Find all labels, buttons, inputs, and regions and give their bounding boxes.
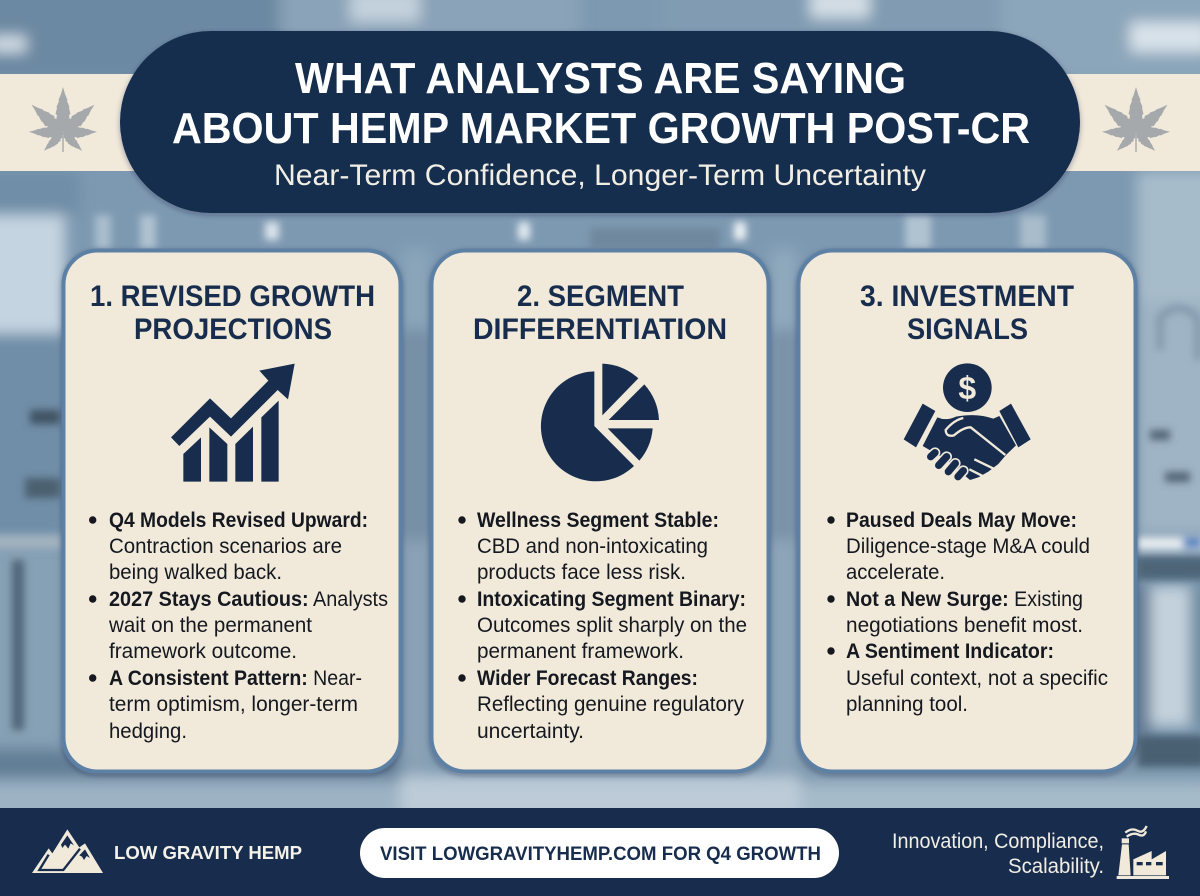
bullet list: investment signals: Useful context, not a specific (846, 667, 1108, 690)
call to action button (360, 828, 839, 878)
bullet list: segment differentiation: Outcomes split sharply on the (477, 614, 747, 637)
bullet list: segment differentiation: Wider Forecast Ranges: (477, 667, 698, 690)
bullet list: revised growth projections: term optimism, longer-term (109, 693, 358, 716)
bullet list: revised growth projections: framework outcome. (109, 640, 297, 663)
heading: revised growth projections: 1. REVISED GROWTH (90, 280, 375, 313)
bullet list: investment signals: Diligence-stage M&A could (846, 535, 1090, 558)
bullet list: revised growth projections: wait on the permanent (108, 614, 312, 637)
heading: investment signals (860, 280, 1074, 346)
bullet list: revised growth projections: 2027 Stays Cautious: Analysts (109, 588, 388, 611)
heading: revised growth projections (90, 280, 375, 346)
tagline (892, 830, 1104, 878)
tagline: Scalability. (1008, 855, 1104, 878)
title: WHAT ANALYSTS ARE SAYING (295, 54, 906, 103)
bullet list: investment signals (827, 509, 1108, 716)
bullet list: revised growth projections: Contraction scenarios are (109, 535, 342, 558)
cream banner strip (0, 74, 1200, 171)
bullet list: revised growth projections: hedging. (109, 720, 187, 743)
bullet list: revised growth projections: Q4 Models Revised Upward: (109, 509, 368, 532)
bullet list: segment differentiation (458, 509, 747, 743)
heading: revised growth projections: PROJECTIONS (134, 313, 332, 346)
bullet list: segment differentiation: Wellness Segment Stable: (477, 509, 719, 532)
icon: mountain logo (32, 829, 103, 873)
heading: segment differentiation: DIFFERENTIATION (473, 313, 727, 346)
icon: hemp leaf right (1100, 87, 1172, 154)
icon: factory (1117, 826, 1169, 879)
bullet list: revised growth projections: A Consistent Pattern: Near- (109, 667, 362, 690)
bullet list: investment signals: A Sentiment Indicator: (846, 640, 1054, 663)
bullet list: segment differentiation: Reflecting genuine regulatory (477, 693, 744, 716)
icon: hemp leaf left (27, 87, 99, 154)
bullet list: investment signals: negotiations benefit most. (846, 614, 1083, 637)
bullet list: revised growth projections (89, 509, 388, 743)
footer bar (0, 808, 1200, 896)
icon: rising bar chart with arrow (171, 364, 295, 482)
heading: investment signals: SIGNALS (907, 313, 1028, 346)
tagline: Innovation, Compliance, (892, 830, 1104, 853)
subtitle: Near-Term Confidence, Longer-Term Uncertainty (274, 159, 926, 192)
title pill (120, 31, 1080, 213)
heading: segment differentiation: 2. SEGMENT (517, 280, 684, 313)
bullet list: segment differentiation: CBD and non-intoxicating (477, 535, 708, 558)
panel: investment signals (798, 250, 1136, 772)
bullet list: investment signals: planning tool. (846, 693, 968, 716)
bullet list: segment differentiation: Intoxicating Segment Binary: (477, 588, 746, 611)
bullet list: investment signals: accelerate. (846, 561, 945, 584)
title (172, 54, 1030, 153)
heading: segment differentiation (473, 280, 727, 346)
bullet list: segment differentiation: permanent framework. (477, 640, 684, 663)
bullet list: segment differentiation: uncertainty. (477, 720, 584, 743)
call to action button: VISIT LOWGRAVITYHEMP.COM FOR Q4 GROWTH (380, 844, 821, 865)
heading: investment signals: 3. INVESTMENT (860, 280, 1074, 313)
bullet list: investment signals: Not a New Surge: Existing (846, 588, 1083, 611)
panel: segment differentiation (432, 250, 768, 772)
icon: pie chart (541, 364, 659, 481)
icon: handshake with dollar coin: $ (958, 370, 976, 406)
icon: handshake with dollar coin (904, 363, 1031, 480)
brand name: LOW GRAVITY HEMP (114, 843, 302, 863)
bullet list: revised growth projections: being walked back. (109, 561, 282, 584)
panel: revised growth projections (64, 250, 400, 772)
title: ABOUT HEMP MARKET GROWTH POST-CR (172, 104, 1030, 153)
bullet list: segment differentiation: products face less risk. (477, 561, 686, 584)
bullet list: investment signals: Paused Deals May Move: (846, 509, 1077, 532)
